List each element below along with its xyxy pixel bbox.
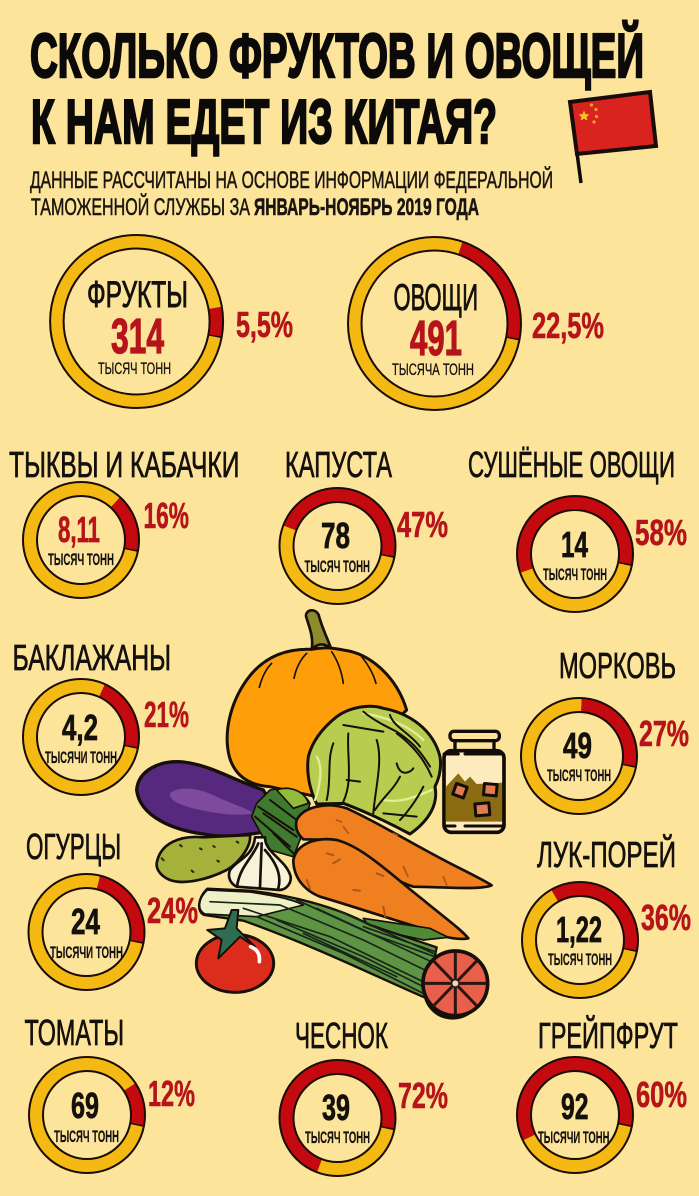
unit: ТЫСЯЧ ТОНН xyxy=(547,767,611,785)
value: 92 xyxy=(561,1086,588,1127)
panel: garlic xyxy=(272,1015,448,1184)
value: 8,11 xyxy=(58,509,100,550)
panel: fruits ring xyxy=(44,229,229,414)
icon: jar xyxy=(444,731,504,832)
vegetables label: ОВОЩИ xyxy=(394,277,478,318)
icon: cabbage xyxy=(308,706,441,834)
fruits value: 314 xyxy=(111,310,164,364)
icon: grapefruit xyxy=(423,951,488,1018)
donut xyxy=(272,1052,403,1184)
donut xyxy=(9,468,153,612)
value: 1,22 xyxy=(556,909,602,950)
percent: 24% xyxy=(147,890,198,931)
heading: БАКЛАЖАНЫ xyxy=(12,637,171,678)
value: 69 xyxy=(71,1085,99,1126)
subtitle: ЯНВАРЬ-НОЯБРЬ 2019 ГОДА xyxy=(254,194,479,221)
icon: tomato xyxy=(196,910,274,992)
panel: vegetables ring xyxy=(333,222,536,425)
donut xyxy=(25,870,148,994)
illustration: vegetables pile xyxy=(137,610,504,1018)
title xyxy=(30,21,644,157)
panel: cabbage xyxy=(272,444,448,612)
panel: pumpkins and squash xyxy=(9,444,239,612)
icon: eggplant xyxy=(137,762,271,836)
icon: china flag xyxy=(570,92,656,183)
donut xyxy=(13,669,149,805)
heading: ТЫКВЫ И КАБАЧКИ xyxy=(9,444,239,485)
vegetables value: 491 xyxy=(410,312,462,366)
heading: ТОМАТЫ xyxy=(24,1012,124,1053)
unit: ТЫСЯЧ ТОНН xyxy=(305,1129,370,1147)
percent: 16% xyxy=(144,495,189,536)
percent: 12% xyxy=(148,1073,195,1114)
icon: leek xyxy=(199,889,448,998)
heading: ОГУРЦЫ xyxy=(26,826,121,867)
panel: grapefruit xyxy=(507,1014,687,1183)
value: 4,2 xyxy=(62,707,98,748)
fruits percent: 5,5% xyxy=(236,304,293,345)
unit: ТЫСЯЧИ ТОНН xyxy=(45,749,117,767)
icon: carrot lower xyxy=(293,839,468,939)
panel: eggplants xyxy=(12,637,189,805)
panel: leek xyxy=(510,833,691,1010)
vegetables percent: 22,5% xyxy=(532,305,604,346)
panel: carrots xyxy=(521,645,689,814)
donut xyxy=(521,698,637,814)
fruits unit: ТЫСЯЧ ТОНН xyxy=(98,360,171,378)
heading: ЧЕСНОК xyxy=(295,1015,388,1056)
icon: cucumber xyxy=(157,835,250,882)
fruits label: ФРУКТЫ xyxy=(87,274,188,315)
unit: ТЫСЯЧИ ТОНН xyxy=(50,944,123,962)
unit: ТЫСЯЧ ТОНН xyxy=(548,951,612,969)
vegetables unit: ТЫСЯЧА ТОНН xyxy=(392,361,474,379)
value: 14 xyxy=(561,524,588,565)
percent: 72% xyxy=(398,1075,448,1116)
unit: ТЫСЯЧ ТОНН xyxy=(48,551,114,569)
icon: carrot upper xyxy=(296,805,492,888)
icon: pumpkin xyxy=(227,610,407,797)
unit: ТЫСЯЧ ТОНН xyxy=(54,1128,119,1146)
value: 39 xyxy=(322,1087,350,1128)
donut xyxy=(510,870,650,1010)
percent: 21% xyxy=(144,694,189,735)
value: 24 xyxy=(71,901,100,942)
panel: dried vegetables xyxy=(468,444,687,619)
donut xyxy=(16,1044,158,1186)
donut xyxy=(510,489,640,619)
icon: garlic xyxy=(229,837,291,890)
donut xyxy=(507,1047,643,1183)
value: 78 xyxy=(321,515,350,556)
donut xyxy=(272,480,403,612)
unit: ТЫСЯЧ ТОНН xyxy=(304,558,370,576)
heading: КАПУСТА xyxy=(285,444,392,485)
unit: ТЫСЯЧИ ТОНН xyxy=(538,1129,610,1147)
subtitle: ТАМОЖЕННОЙ СЛУЖБЫ ЗА xyxy=(31,193,250,221)
value: 49 xyxy=(563,725,592,766)
percent: 47% xyxy=(397,504,448,545)
subtitle xyxy=(30,166,553,221)
panel: cucumbers xyxy=(25,826,198,994)
panel: tomatoes xyxy=(16,1012,195,1186)
icon: carrot tops xyxy=(252,788,310,857)
unit: ТЫСЯЧ ТОНН xyxy=(543,566,607,584)
